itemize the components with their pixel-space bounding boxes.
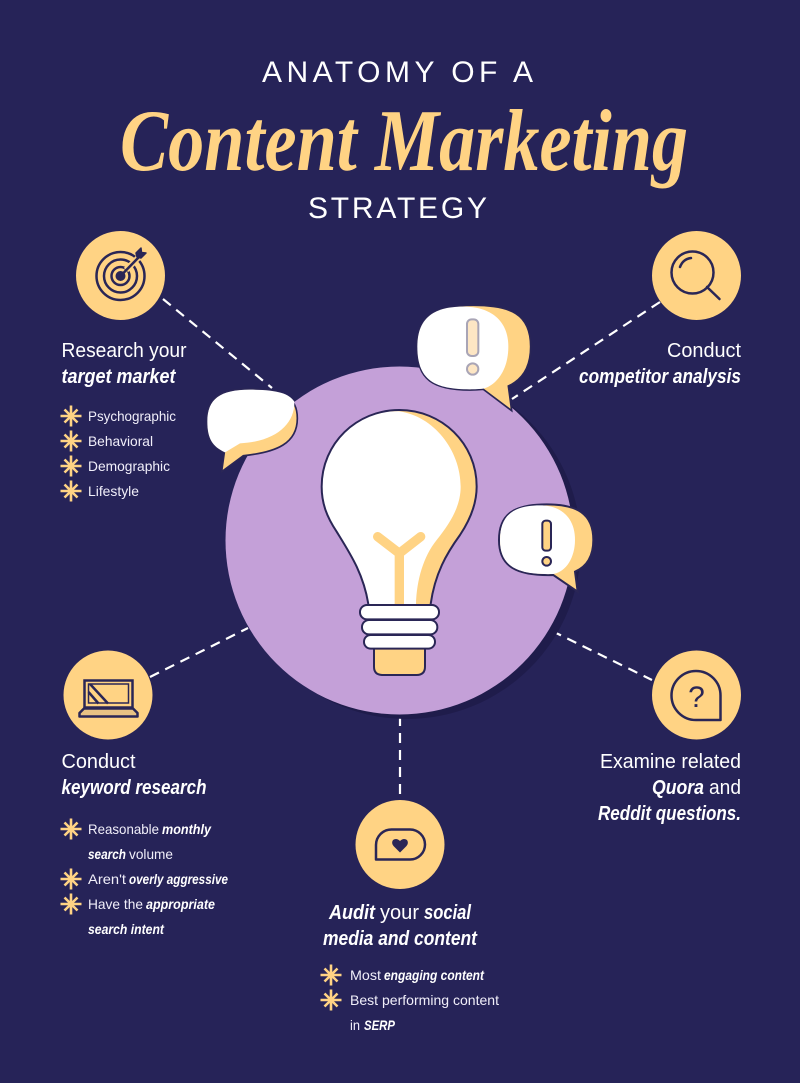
heading: media and content (323, 928, 478, 950)
heading: Quora (652, 777, 704, 799)
bulb filament (378, 537, 421, 604)
icon: heart message (356, 800, 444, 889)
list: target market attributes (60, 406, 176, 502)
heading: target market (62, 366, 177, 388)
list: keyword criteria: overly aggressive (129, 871, 228, 887)
title: Content Marketing (120, 93, 688, 190)
panel: research target market (60, 231, 187, 502)
panel: audit social media and content (320, 800, 499, 1033)
dashed connector: competitor analysis (512, 302, 660, 399)
title (120, 56, 688, 225)
heading: social (424, 902, 471, 924)
heading (62, 340, 187, 388)
panel: Quora and Reddit questions (598, 650, 741, 825)
dashed connector: Quora and Reddit (552, 631, 652, 680)
list: keyword criteria: Have the (88, 896, 143, 912)
list: audit items: engaging content (384, 967, 485, 983)
heading: Conduct (62, 751, 136, 773)
bulb glass (322, 410, 477, 604)
light bulb and speech bubbles (207, 305, 593, 675)
heading: Conduct (667, 340, 741, 362)
list: target market attributes: Demographic (88, 458, 170, 474)
dashed connector: social audit (399, 716, 401, 800)
panel: competitor analysis (579, 231, 741, 388)
icon: target (76, 231, 165, 320)
list: keyword criteria: Aren't (88, 871, 126, 887)
heading (598, 751, 741, 825)
central purple circle (226, 366, 574, 714)
bulb base rings (360, 605, 439, 649)
heading: keyword research (62, 777, 206, 799)
list: audit items (320, 964, 499, 1033)
heading (579, 340, 741, 388)
panel: keyword research (60, 650, 228, 937)
heading: your (380, 902, 419, 924)
list: keyword criteria: monthly (162, 821, 212, 837)
icon: question bubble (652, 650, 741, 740)
title: STRATEGY (308, 192, 487, 225)
list: target market attributes: Behavioral (88, 433, 153, 449)
speech bubble: right with exclamation (499, 504, 593, 592)
heading: and (709, 777, 741, 799)
icon: magnifier (652, 231, 741, 320)
list: target market attributes: Lifestyle (88, 483, 139, 499)
heading: Examine related (600, 751, 741, 773)
central circle shadow (233, 371, 581, 719)
heading: Audit (328, 902, 376, 924)
heading: Research your (62, 340, 187, 362)
heading: competitor analysis (579, 366, 741, 388)
list: keyword criteria: search (88, 846, 126, 862)
list: audit items: in (350, 1017, 360, 1033)
speech bubble: left (207, 389, 297, 472)
heading (62, 751, 206, 799)
list: audit items: Most (350, 967, 381, 983)
title: ANATOMY OF A (262, 56, 533, 89)
list: keyword criteria: appropriate (146, 896, 215, 912)
heading (323, 902, 478, 950)
icon: question bubble: ? (688, 681, 705, 714)
list: keyword criteria (60, 818, 228, 937)
list: keyword criteria: volume (129, 846, 173, 862)
heading: Reddit questions. (598, 803, 741, 825)
bulb socket (374, 647, 425, 675)
list: keyword criteria: search intent (88, 921, 165, 937)
list: audit items: Best performing content (350, 992, 499, 1008)
dashed connector: keyword research (150, 628, 248, 677)
icon: laptop (64, 650, 152, 740)
speech bubble: top with exclamation (417, 305, 531, 411)
dashed connector: target market (163, 299, 272, 388)
list: keyword criteria: Reasonable (88, 821, 159, 837)
list: target market attributes: Psychographic (88, 408, 176, 424)
list: audit items: SERP (364, 1017, 396, 1033)
